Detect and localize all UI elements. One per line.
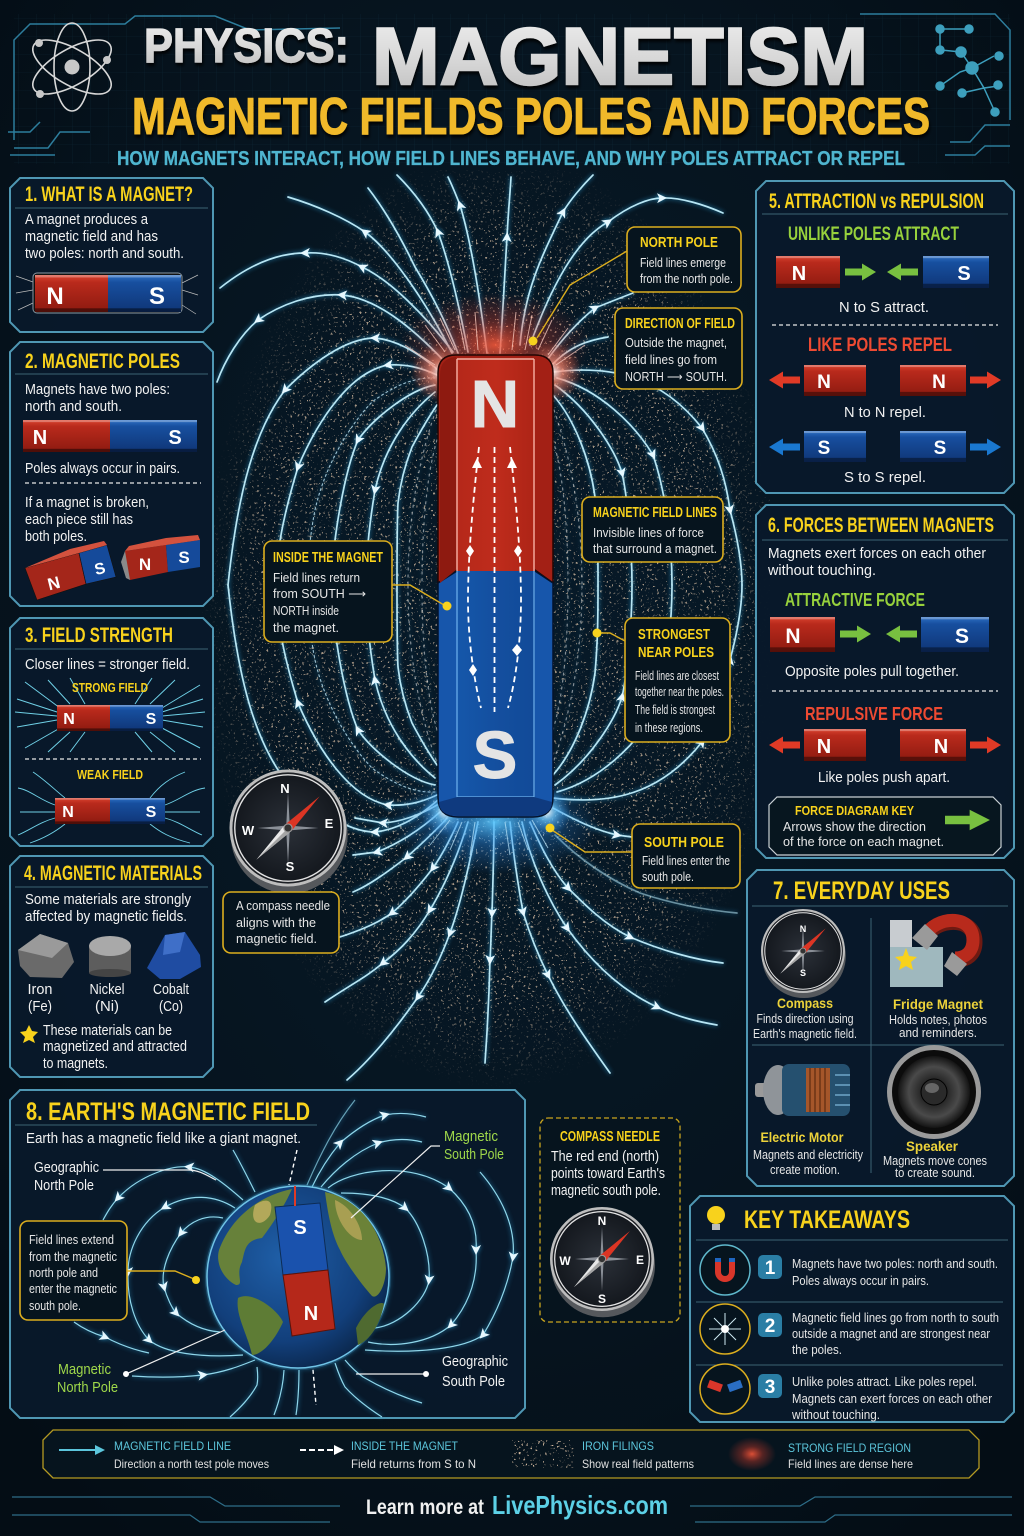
item: speaker: Speaker bbox=[906, 1138, 959, 1154]
repulsive magnets bbox=[769, 729, 1001, 761]
title: MAGNETISM bbox=[372, 12, 868, 102]
text: Poles always occur in pairs. bbox=[25, 461, 180, 477]
heading: 7. EVERYDAY USES bbox=[773, 877, 950, 905]
heading: KEY TAKEAWAYS bbox=[744, 1206, 910, 1234]
title: PHYSICS: bbox=[144, 20, 349, 73]
panel: compass needle bbox=[540, 1118, 680, 1322]
takeaway 1: Poles always occur in pairs. bbox=[792, 1274, 929, 1288]
bar magnet: N bbox=[46, 283, 64, 310]
icon: compass: S bbox=[286, 859, 295, 874]
earth axis bbox=[289, 1150, 316, 1405]
legend: iron filings bbox=[512, 1439, 694, 1471]
S S repel magnets bbox=[769, 431, 1001, 462]
footer: Learn more at bbox=[366, 1496, 484, 1519]
label: magnetic north pole bbox=[57, 1330, 225, 1396]
callout: south pole: SOUTH POLE bbox=[644, 835, 724, 851]
strong field magnet bbox=[15, 678, 205, 752]
note text bbox=[43, 1023, 187, 1072]
text: each piece still has bbox=[25, 512, 133, 528]
callout: field lines extend bbox=[20, 1221, 200, 1320]
icon: compass: E bbox=[325, 816, 334, 831]
callout: magnetic field lines: Invisible lines of force bbox=[593, 526, 704, 540]
callout: inside the magnet: the magnet. bbox=[273, 621, 339, 635]
callout: strongest near poles: together near the poles. bbox=[635, 685, 724, 699]
caption: Like poles push apart. bbox=[818, 770, 950, 786]
callout: inside the magnet bbox=[264, 541, 452, 642]
weak field magnet bbox=[18, 767, 205, 843]
takeaway 1 bbox=[700, 1245, 998, 1295]
callout: inside the magnet: NORTH inside bbox=[273, 604, 339, 618]
bar magnet: S bbox=[149, 283, 165, 310]
callout: compass needle alignment: aligns with the bbox=[236, 916, 316, 930]
item: electric motor bbox=[753, 1064, 864, 1177]
footer bbox=[12, 1490, 1012, 1522]
callout: north pole bbox=[528, 227, 741, 346]
text: points toward Earth's bbox=[551, 1166, 665, 1182]
takeaway 2 bbox=[700, 1304, 999, 1357]
heading: 8. EARTH'S MAGNETIC FIELD bbox=[26, 1098, 310, 1126]
text bbox=[767, 546, 986, 579]
force diagram key: Arrows show the direction bbox=[783, 820, 926, 834]
cobalt sample bbox=[147, 932, 201, 1015]
weak field magnet: S bbox=[146, 804, 157, 821]
iron sample: (Fe) bbox=[28, 999, 52, 1015]
item: electric motor: Electric Motor bbox=[760, 1129, 844, 1145]
panel: everyday uses bbox=[747, 870, 1014, 1186]
strong field magnet: STRONG FIELD bbox=[72, 680, 148, 695]
caption: N to S attract. bbox=[839, 300, 929, 316]
item: compass: S bbox=[800, 968, 806, 978]
broken magnet pieces bbox=[25, 535, 200, 600]
icon: light bulb bbox=[707, 1206, 725, 1230]
text: affected by magnetic fields. bbox=[25, 909, 187, 925]
attractive subheading: ATTRACTIVE FORCE bbox=[785, 590, 925, 610]
takeaway 1: 1 bbox=[765, 1258, 776, 1279]
cobalt sample: (Co) bbox=[159, 999, 183, 1015]
attractive magnets: S bbox=[955, 625, 969, 648]
attractive magnets bbox=[770, 617, 989, 652]
icon: molecule network bbox=[936, 25, 1003, 116]
callout: inside the magnet: from SOUTH ⟶ bbox=[273, 587, 366, 601]
caption: N to N repel. bbox=[844, 405, 926, 421]
item: electric motor: Magnets and electricity bbox=[753, 1148, 864, 1162]
legend: inside the magnet: INSIDE THE MAGNET bbox=[351, 1439, 459, 1453]
earth magnet: N bbox=[304, 1303, 318, 1325]
text: both poles. bbox=[25, 529, 87, 545]
callout: strongest near poles bbox=[592, 618, 730, 742]
item: fridge magnet: Fridge Magnet bbox=[893, 996, 983, 1012]
callout: inside the magnet: Field lines return bbox=[273, 571, 360, 585]
callout: strongest near poles: STRONGEST bbox=[638, 627, 710, 643]
force diagram key bbox=[769, 797, 1001, 855]
takeaway 3: Unlike poles attract. Like poles repel. bbox=[792, 1375, 977, 1389]
panel: what is a magnet bbox=[10, 178, 213, 332]
header bbox=[8, 14, 1010, 164]
icon: compass: N bbox=[598, 1214, 606, 1228]
callout: strongest near poles: Field lines are closest bbox=[635, 669, 719, 683]
label: magnetic north pole: North Pole bbox=[57, 1379, 118, 1396]
note text: These materials can be bbox=[43, 1023, 172, 1039]
item: compass bbox=[753, 909, 857, 1041]
icon: compass bbox=[550, 1207, 655, 1317]
panel: magnetic poles bbox=[10, 342, 213, 606]
icon: compass: N bbox=[280, 781, 290, 796]
nickel sample: (Ni) bbox=[95, 999, 119, 1015]
text bbox=[25, 495, 149, 545]
force diagram key: of the force on each magnet. bbox=[783, 835, 944, 849]
body text bbox=[25, 212, 184, 262]
N N repel magnets: N bbox=[817, 372, 831, 393]
panel: field strength bbox=[10, 618, 213, 846]
callout: north pole: from the north pole. bbox=[640, 272, 733, 286]
blue glow at south pole bbox=[390, 770, 600, 874]
label: magnetic south pole: Magnetic bbox=[444, 1128, 498, 1145]
force diagram key: FORCE DIAGRAM KEY bbox=[795, 803, 914, 818]
callout: field lines extend: north pole and bbox=[29, 1266, 98, 1280]
text: If a magnet is broken, bbox=[25, 495, 149, 511]
callout: north pole: Field lines emerge bbox=[640, 256, 726, 270]
weak field magnet: WEAK FIELD bbox=[77, 767, 143, 782]
legend: strong field region bbox=[728, 1437, 913, 1471]
callout: direction of field bbox=[615, 308, 742, 389]
panel: earth's magnetic field bbox=[10, 1090, 525, 1418]
callout: direction of field: field lines go from bbox=[625, 353, 717, 367]
callout: south pole bbox=[546, 824, 740, 888]
label: magnetic south pole bbox=[351, 1128, 504, 1218]
S S repel magnets: S bbox=[818, 438, 830, 459]
text bbox=[551, 1149, 665, 1199]
subtitle: HOW MAGNETS INTERACT, HOW FIELD LINES BEHAVE, AND WHY POLES ATTRACT OR REPEL bbox=[117, 148, 905, 170]
text bbox=[25, 382, 170, 415]
weak field magnet: N bbox=[62, 804, 74, 821]
label: geographic south pole: South Pole bbox=[442, 1374, 505, 1390]
legend: inside the magnet: Field returns from S to N bbox=[351, 1457, 476, 1471]
nickel sample bbox=[89, 936, 131, 1015]
attract magnets: S bbox=[957, 263, 971, 285]
callout: compass needle alignment: A compass needle bbox=[236, 899, 330, 913]
heading: COMPASS NEEDLE bbox=[560, 1129, 660, 1145]
text: The red end (north) bbox=[551, 1149, 659, 1165]
item: fridge magnet: Holds notes, photos bbox=[889, 1013, 987, 1027]
takeaway 3 bbox=[700, 1364, 992, 1422]
takeaway 3: Magnets can exert forces on each other bbox=[792, 1392, 992, 1406]
legend: field line bbox=[59, 1439, 269, 1471]
callout: direction of field: NORTH ⟶ SOUTH. bbox=[625, 370, 727, 384]
takeaway 2: outside a magnet and are strongest near bbox=[792, 1327, 990, 1341]
icon: compass: S bbox=[598, 1292, 606, 1306]
broken magnet pieces: S bbox=[93, 560, 108, 579]
bar magnet: N bbox=[33, 427, 47, 449]
attractive magnets: N bbox=[785, 625, 801, 648]
item: compass: Finds direction using bbox=[756, 1012, 854, 1026]
item: speaker: to create sound. bbox=[895, 1166, 975, 1180]
text: Earth has a magnetic field like a giant magnet. bbox=[26, 1131, 301, 1147]
text: north and south. bbox=[25, 399, 122, 415]
callout: field lines extend: south pole. bbox=[29, 1299, 81, 1313]
item: compass: Earth's magnetic field. bbox=[753, 1027, 857, 1041]
earth magnet bbox=[275, 1186, 335, 1336]
callout: compass needle alignment: magnetic field. bbox=[236, 932, 317, 946]
label: geographic south pole bbox=[356, 1354, 508, 1390]
callout: inside the magnet: INSIDE THE MAGNET bbox=[273, 550, 383, 566]
takeaway 1: Magnets have two poles: north and south. bbox=[792, 1257, 998, 1271]
callout: south pole: Field lines enter the bbox=[642, 854, 730, 868]
icon: compass: E bbox=[636, 1253, 644, 1267]
attract magnets bbox=[776, 256, 989, 288]
attract magnets: N bbox=[792, 263, 806, 285]
callout: south pole: south pole. bbox=[642, 870, 694, 884]
item: fridge magnet bbox=[889, 920, 987, 1040]
iron sample: Iron bbox=[28, 982, 52, 998]
text: Magnets have two poles: bbox=[25, 382, 170, 398]
legend: iron filings: Show real field patterns bbox=[582, 1457, 694, 1471]
text: Closer lines = stronger field. bbox=[25, 657, 190, 673]
callout: strongest near poles: The field is strongest bbox=[635, 703, 715, 717]
strong field magnet: S bbox=[146, 711, 157, 728]
bar magnet: S bbox=[168, 427, 182, 449]
broken magnet pieces: N bbox=[139, 555, 151, 574]
callout: compass needle alignment bbox=[223, 892, 339, 953]
text: Magnets exert forces on each other bbox=[768, 546, 986, 562]
text: magnetic south pole. bbox=[551, 1183, 661, 1199]
icon: star bbox=[20, 1025, 38, 1043]
callout: field lines extend: enter the magnetic bbox=[29, 1282, 117, 1296]
icon: compass: W bbox=[242, 823, 255, 838]
footer: LivePhysics.com bbox=[492, 1490, 668, 1520]
callout: field lines extend: from the magnetic bbox=[29, 1250, 117, 1264]
heading: 3. FIELD STRENGTH bbox=[25, 624, 173, 647]
repulsive magnets: N bbox=[817, 736, 831, 758]
panel: key takeaways bbox=[690, 1196, 1014, 1422]
red glow at north pole bbox=[400, 293, 590, 402]
nickel sample: Nickel bbox=[90, 982, 124, 998]
callout: field lines extend: Field lines extend bbox=[29, 1233, 114, 1247]
takeaway 3: 3 bbox=[765, 1377, 775, 1398]
title bbox=[132, 12, 930, 146]
takeaway 2: Magnetic field lines go from north to south bbox=[792, 1311, 999, 1325]
body text: A magnet produces a bbox=[25, 212, 149, 228]
callout: direction of field: DIRECTION OF FIELD bbox=[625, 316, 735, 332]
cobalt sample: Cobalt bbox=[153, 982, 189, 998]
label: magnetic north pole: Magnetic bbox=[58, 1361, 111, 1378]
repulsive subheading: REPULSIVE FORCE bbox=[805, 704, 943, 724]
item: speaker: Magnets move cones bbox=[883, 1154, 987, 1168]
legend: iron filings: IRON FILINGS bbox=[582, 1439, 654, 1453]
callout: magnetic field lines bbox=[582, 497, 723, 562]
text: Some materials are strongly bbox=[25, 892, 192, 908]
legend: inside the magnet bbox=[300, 1439, 476, 1471]
icon: compass bbox=[230, 770, 348, 894]
magnetic field diagram bbox=[200, 170, 770, 1090]
legend: strong field region: Field lines are dense here bbox=[788, 1457, 913, 1471]
item: compass: Compass bbox=[777, 995, 833, 1011]
takeaway 3: without touching. bbox=[791, 1408, 880, 1422]
caption: S to S repel. bbox=[844, 470, 926, 486]
text: without touching. bbox=[767, 563, 876, 579]
S S repel magnets: S bbox=[934, 438, 946, 459]
panel: magnetic materials bbox=[10, 856, 213, 1077]
item: electric motor: create motion. bbox=[770, 1163, 840, 1177]
bar magnet bbox=[23, 420, 197, 452]
iron sample bbox=[18, 934, 74, 1015]
item: fridge magnet: and reminders. bbox=[899, 1026, 977, 1040]
legend: field line: Direction a north test pole moves bbox=[114, 1457, 269, 1471]
callout: magnetic field lines: that surround a magnet. bbox=[593, 542, 717, 556]
label: magnetic south pole: South Pole bbox=[444, 1146, 504, 1163]
panel: forces between magnets bbox=[756, 505, 1014, 858]
N N repel magnets: N bbox=[932, 372, 946, 393]
label: geographic north pole bbox=[34, 1160, 216, 1194]
item: speaker bbox=[883, 1045, 987, 1180]
takeaway 2: 2 bbox=[765, 1316, 775, 1337]
callout: north pole: NORTH POLE bbox=[640, 235, 718, 251]
note text: to magnets. bbox=[43, 1056, 108, 1072]
legend: field line: MAGNETIC FIELD LINE bbox=[114, 1439, 231, 1453]
repulsive magnets: N bbox=[934, 736, 948, 758]
broken magnet pieces: N bbox=[46, 573, 62, 594]
N N repel magnets bbox=[769, 365, 1001, 396]
takeaway 2: the poles. bbox=[792, 1343, 842, 1357]
repel subheading: LIKE POLES REPEL bbox=[808, 335, 952, 356]
legend: strong field region: STRONG FIELD REGION bbox=[788, 1441, 911, 1455]
callout: strongest near poles: in these regions. bbox=[635, 721, 703, 735]
broken magnet pieces: S bbox=[178, 548, 190, 567]
text bbox=[25, 892, 192, 925]
heading: 2. MAGNETIC POLES bbox=[25, 350, 180, 373]
pole label N: N bbox=[471, 367, 519, 442]
body text: magnetic field and has bbox=[25, 229, 158, 245]
earth field lines bbox=[74, 1100, 513, 1417]
earth magnet: S bbox=[293, 1217, 307, 1239]
callout: strongest near poles: NEAR POLES bbox=[638, 645, 714, 661]
pole label S: S bbox=[473, 718, 517, 793]
icon: atom bbox=[25, 23, 119, 111]
heading: 4. MAGNETIC MATERIALS bbox=[24, 862, 202, 885]
panel: attraction vs repulsion bbox=[756, 181, 1014, 493]
icon: compass: W bbox=[559, 1254, 571, 1268]
heading: 1. WHAT IS A MAGNET? bbox=[25, 183, 193, 206]
bar magnet bbox=[438, 355, 553, 817]
callout: magnetic field lines: MAGNETIC FIELD LINES bbox=[593, 505, 717, 521]
caption: Opposite poles pull together. bbox=[785, 664, 959, 680]
bar magnet bbox=[16, 273, 198, 314]
label: geographic south pole: Geographic bbox=[442, 1354, 508, 1370]
strong field magnet: N bbox=[63, 711, 75, 728]
legend bbox=[43, 1430, 979, 1478]
item: compass: N bbox=[800, 924, 806, 934]
note text: magnetized and attracted bbox=[43, 1039, 187, 1055]
label: geographic north pole: North Pole bbox=[34, 1178, 94, 1194]
body text: two poles: north and south. bbox=[25, 246, 184, 262]
internal field lines dashed bbox=[466, 447, 522, 712]
globe bbox=[205, 1184, 391, 1370]
label: geographic north pole: Geographic bbox=[34, 1160, 99, 1176]
callout: direction of field: Outside the magnet, bbox=[625, 336, 727, 350]
attract subheading: UNLIKE POLES ATTRACT bbox=[788, 224, 959, 245]
